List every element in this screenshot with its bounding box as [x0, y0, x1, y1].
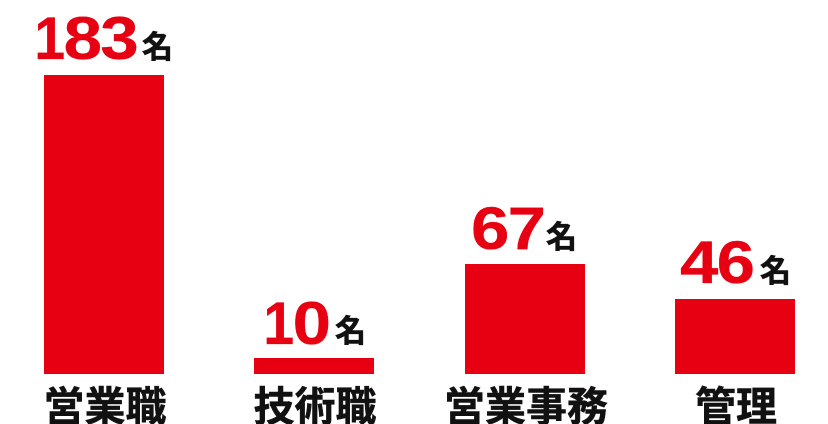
- bar: 技術職: [254, 358, 374, 374]
- value: 183名: 83: [64, 5, 137, 72]
- value: 10名: 0: [293, 290, 329, 357]
- unit: 名: 名: [546, 220, 577, 255]
- unit: 名: 名: [760, 254, 791, 289]
- value: 46名: 46: [680, 229, 753, 296]
- bar: 管理: [675, 299, 795, 374]
- value: 183名: 1: [34, 5, 64, 72]
- value: 67名: 67: [471, 195, 544, 262]
- value: 10名: [263, 290, 329, 357]
- value: 10名: 1: [263, 290, 293, 357]
- bar: 営業職: [44, 75, 164, 374]
- unit: 名: 名: [142, 30, 173, 65]
- bar: 営業事務: [465, 264, 585, 374]
- unit: 名: 名: [335, 314, 366, 349]
